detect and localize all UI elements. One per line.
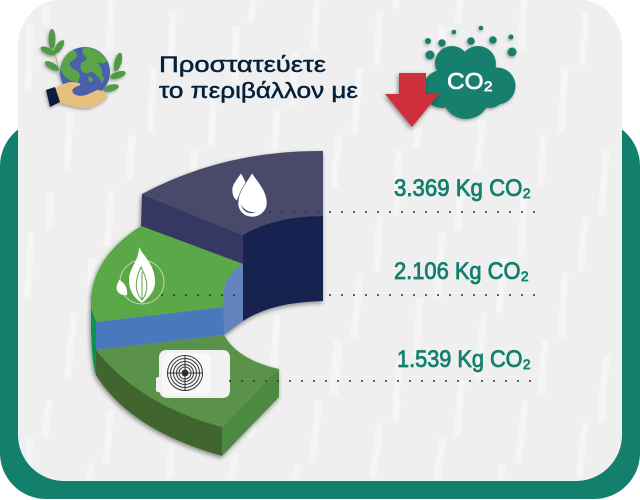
cloud <box>423 46 516 119</box>
CO2 label: CO₂ <box>447 68 493 94</box>
fan grille <box>167 355 203 391</box>
icon: gas flame leaf <box>117 247 164 304</box>
segment: gas <box>91 226 243 375</box>
chart: 3D segmented ring <box>91 151 323 456</box>
teal backing frame <box>0 120 640 499</box>
values <box>394 175 531 373</box>
title: Προστατεύετε <box>159 52 326 77</box>
value: water: 3.369 Kg CO₂ <box>394 175 531 202</box>
icon: red down arrow <box>385 73 439 127</box>
icon: CO2 cloud <box>423 26 516 119</box>
leaf branches <box>39 29 127 93</box>
segment: water <box>141 151 323 321</box>
title <box>159 52 358 103</box>
shirt cuff <box>46 87 60 107</box>
value: heat pump: 1.539 Kg CO₂ <box>397 346 531 373</box>
icon: water drops <box>232 173 267 217</box>
hand <box>55 82 108 108</box>
dotted leader lines <box>162 212 538 381</box>
value: gas: 2.106 Kg CO₂ <box>394 258 529 285</box>
bubbles <box>425 26 516 60</box>
globe <box>60 47 110 97</box>
segment: heat pump <box>96 335 279 456</box>
title: το περιβάλλον με <box>159 78 358 103</box>
icon: hand holding globe <box>39 29 127 108</box>
icon: outdoor AC unit <box>156 350 230 398</box>
